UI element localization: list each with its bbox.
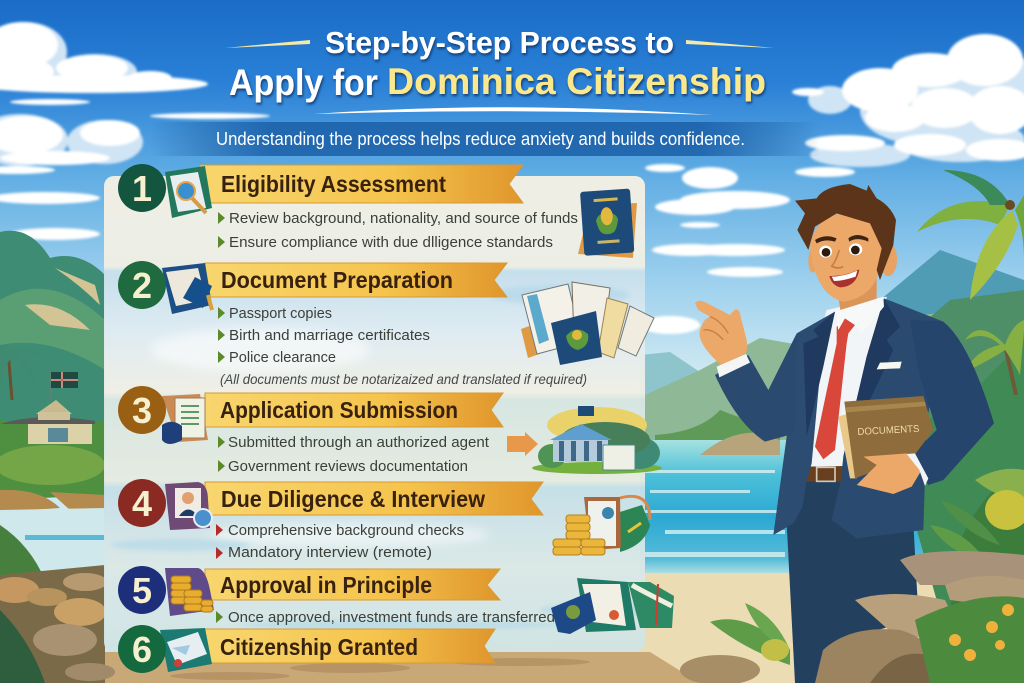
coins, clipboard and shield illustration	[553, 496, 650, 555]
jacket raised arm	[715, 333, 797, 442]
step 3 icon	[162, 394, 208, 444]
background: near foliage by beach	[680, 603, 790, 683]
step 3 ribbon	[205, 393, 503, 427]
step 2 bullet a: Passport copies	[229, 305, 332, 322]
step 2 ribbon	[205, 263, 507, 297]
step 6 number	[118, 625, 166, 673]
eyes and brows	[815, 235, 868, 258]
subtitle: Understanding the process helps reduce anxiety and builds confidence.	[216, 129, 745, 149]
folder: DOCUMENTS	[857, 424, 920, 438]
step 5 ribbon	[205, 569, 500, 600]
step 1: eligibility assessment	[118, 164, 637, 258]
step 2 bullet c: Police clearance	[229, 349, 336, 366]
hair	[795, 184, 896, 280]
step 5 icon	[165, 568, 214, 616]
nose	[832, 250, 843, 268]
folder	[838, 396, 933, 478]
mouth	[829, 269, 859, 287]
step 1 number	[118, 164, 166, 212]
title swoosh	[314, 107, 712, 115]
step 2: document preparation	[118, 261, 654, 387]
step 4 bullet b: Mandatory interview (remote)	[228, 544, 432, 561]
holding hand	[857, 453, 921, 494]
jacket bent arm	[910, 320, 994, 485]
step 4 icon	[165, 482, 212, 530]
step 1 bullet b: Ensure compliance with due dlligence standards	[229, 234, 553, 251]
person pointing, holding documents	[695, 184, 994, 683]
background: sea	[640, 433, 960, 580]
step 1 icon	[165, 166, 212, 218]
step 2 number	[118, 261, 166, 309]
trousers	[787, 478, 919, 683]
panel: steps	[104, 176, 660, 652]
step 4 bullet a: Comprehensive background checks	[228, 522, 464, 539]
step 2 icon	[162, 263, 212, 314]
step 3 number	[118, 386, 166, 434]
step 5 number: 5	[132, 570, 152, 611]
flag and building	[0, 372, 95, 444]
title line 1: Step-by-Step Process to	[325, 25, 674, 60]
step 4 number: 4	[132, 483, 152, 524]
subtitle band	[150, 122, 820, 156]
belt	[805, 466, 845, 482]
background: beach sand under panel	[40, 652, 700, 683]
step 4: due diligence and interview	[118, 479, 650, 561]
tie	[815, 318, 855, 459]
background: mountains	[640, 250, 1024, 480]
foreground rocks and flowers	[815, 551, 1024, 683]
step 4 number	[118, 479, 166, 527]
title	[229, 25, 766, 103]
step 2 number: 2	[132, 265, 152, 306]
pocket square	[877, 362, 902, 369]
step 2 bullet b: Birth and marriage certificates	[229, 327, 430, 344]
step 1 title: Eligibility Assessment	[221, 171, 446, 197]
lapels	[803, 298, 900, 457]
left cuff	[717, 354, 750, 377]
jacket left front	[773, 312, 835, 535]
shirt	[803, 297, 887, 470]
pointing hand	[695, 301, 747, 366]
title flourish right	[686, 40, 774, 48]
step 4 ribbon	[205, 482, 543, 515]
step 3: application submission	[118, 386, 662, 475]
background: left shore	[0, 231, 115, 683]
step 2 title: Document Preparation	[221, 267, 453, 293]
step 1 ribbon	[200, 165, 523, 203]
step 1 passport illustration	[578, 189, 637, 258]
step 3 bullet b: Government reviews documentation	[228, 458, 468, 475]
step 3 title: Application Submission	[220, 397, 458, 423]
step 5: approval in principle	[118, 566, 674, 634]
step 5 bullet: Once approved, investment funds are transferred	[228, 609, 555, 626]
step 5 number	[118, 566, 166, 614]
right cuff	[907, 453, 928, 486]
government building illustration	[532, 406, 662, 474]
ears	[808, 243, 897, 276]
step 4 title: Due Diligence & Interview	[221, 486, 485, 512]
title flourish left	[225, 40, 310, 48]
step 6 ribbon	[205, 629, 495, 663]
step 6 title: Citizenship Granted	[220, 634, 418, 660]
passport, certificate and flag illustration	[551, 578, 674, 634]
step 5 title: Approval in Principle	[220, 572, 432, 598]
title line 2 white: Apply for	[229, 62, 378, 103]
step 6: citizenship granted	[118, 625, 495, 673]
step 6 number: 6	[132, 629, 152, 670]
step 2 note: (All documents must be notarizaized and translated if required)	[220, 371, 587, 387]
step 6 icon	[160, 628, 212, 672]
step 3 number: 3	[132, 390, 152, 431]
background: beach	[0, 573, 960, 683]
background: clouds	[0, 22, 1024, 334]
title line 2 yellow: Dominica Citizenship	[387, 61, 766, 102]
jacket right front	[832, 298, 943, 538]
step 1 number: 1	[132, 168, 152, 209]
step 2 documents illustration	[521, 282, 654, 365]
step 3 bullet a: Submitted through an authorized agent	[228, 434, 490, 451]
background: right foliage and palms	[900, 170, 1024, 683]
neck	[837, 277, 877, 318]
step 1 bullet a: Review background, nationality, and source of funds	[229, 210, 578, 227]
face	[810, 213, 882, 302]
collar	[835, 297, 884, 333]
arrow to government building	[507, 432, 538, 456]
